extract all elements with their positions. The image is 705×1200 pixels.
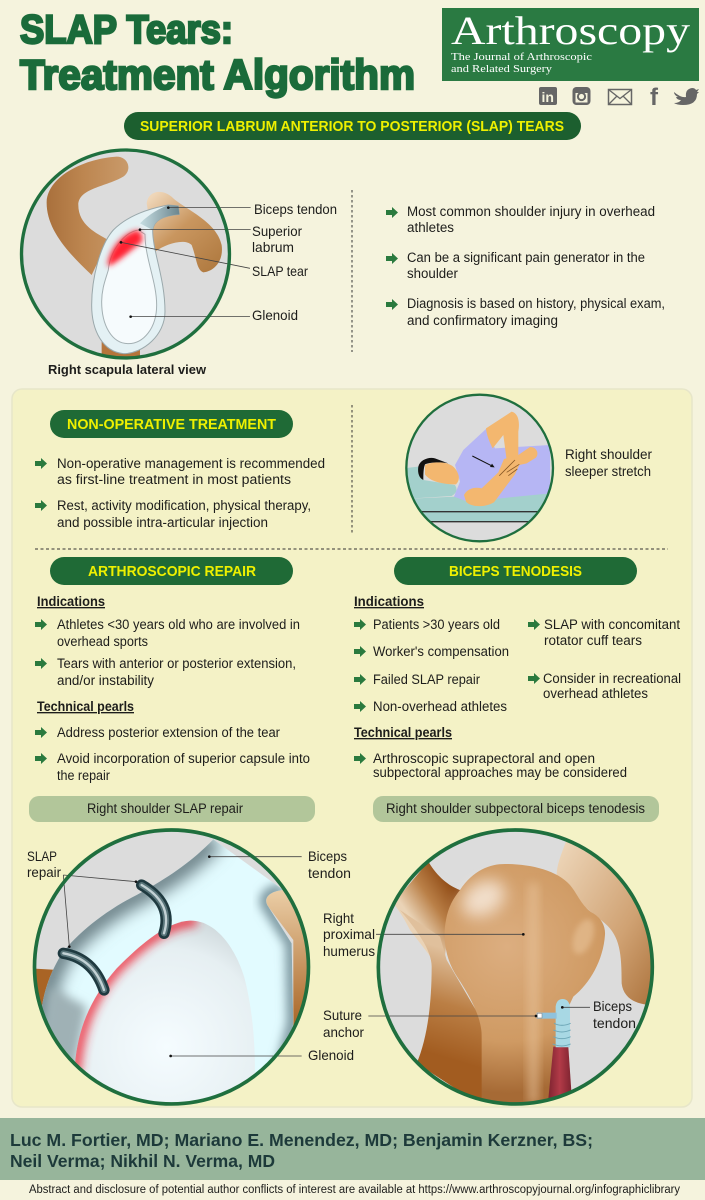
- tenodesis labels: humerus: [323, 943, 375, 959]
- illustration: subpectoral biceps tenodesis: [368, 830, 660, 1107]
- biceps tenodesis text: rotator cuff tears: [544, 633, 642, 648]
- title: SLAP Tears:: [20, 8, 233, 52]
- biceps tenodesis text: Non-overhead athletes: [373, 699, 507, 714]
- anatomy labels: Glenoid: [252, 307, 298, 323]
- journal logo: The Journal of Arthroscopic: [451, 52, 592, 63]
- SLAP repair labels: [27, 848, 354, 1063]
- biceps tenodesis text: [354, 594, 681, 780]
- caption pill: subpectoral biceps tenodesis: [373, 796, 659, 822]
- SLAP repair labels: SLAP: [27, 848, 57, 864]
- sleeper stretch label: sleeper stretch: [565, 463, 651, 479]
- social icons: [539, 84, 699, 111]
- tenodesis labels: Biceps: [593, 998, 632, 1014]
- non-operative bullets: as first-line treatment in most patients: [57, 472, 291, 487]
- callout lines: [120, 206, 251, 318]
- arthroscopic repair text: and/or instability: [57, 673, 154, 688]
- arthroscopic repair text: Athletes <30 years old who are involved in: [57, 617, 300, 632]
- arthroscopic repair text: Indications: [37, 594, 105, 609]
- authors band: Luc M. Fortier, MD; Mariano E. Menendez, MD; Benjamin Kerzner, BS;: [10, 1130, 593, 1150]
- biceps tenodesis text: Worker's compensation: [373, 644, 509, 659]
- overview bullets: shoulder: [407, 266, 458, 281]
- tenodesis labels: Suture: [323, 1007, 362, 1023]
- journal logo: and Related Surgery: [451, 64, 553, 75]
- non-operative bullets: [35, 456, 325, 530]
- anatomy labels: Superior: [252, 223, 302, 239]
- SLAP repair labels: Glenoid: [308, 1047, 354, 1063]
- arthroscopic repair text: Avoid incorporation of superior capsule into: [57, 751, 310, 766]
- biceps tenodesis text: Consider in recreational: [543, 671, 681, 686]
- social icons: in: [542, 89, 554, 105]
- caption pill: SLAP repair: [29, 796, 315, 822]
- panel: treatment: [12, 389, 692, 1107]
- tenodesis labels: tendon: [593, 1015, 636, 1031]
- anatomy illustration: right scapula lateral view: [21, 150, 251, 362]
- biceps tenodesis text: overhead athletes: [543, 686, 648, 701]
- biceps tenodesis text: Indications: [354, 594, 424, 609]
- tenodesis labels: proximal: [323, 926, 375, 942]
- tenodesis labels: anchor: [323, 1024, 364, 1040]
- heading pill: non-operative treatment: [50, 410, 293, 438]
- biceps tenodesis text: Technical pearls: [354, 725, 452, 740]
- biceps tenodesis text: Patients >30 years old: [373, 617, 500, 632]
- heading pill: arthroscopic repair: ARTHROSCOPIC REPAIR: [88, 563, 256, 580]
- authors band: [0, 1118, 705, 1180]
- anatomy labels: SLAP tear: [252, 263, 308, 279]
- biceps tenodesis text: SLAP with concomitant: [544, 617, 680, 632]
- biceps tenodesis text: Arthroscopic suprapectoral and open: [373, 751, 595, 766]
- journal logo: Arthroscopy: [451, 8, 690, 53]
- overview bullets: and confirmatory imaging: [407, 313, 558, 328]
- sleeper stretch label: [565, 446, 652, 479]
- arthroscopic repair text: Address posterior extension of the tear: [57, 725, 280, 740]
- illustration: SLAP repair: [30, 830, 313, 1120]
- journal logo: [442, 8, 699, 81]
- arthroscopic repair text: overhead sports: [57, 634, 148, 649]
- caption pill: SLAP repair: Right shoulder SLAP repair: [87, 801, 243, 816]
- tenodesis labels: [323, 910, 636, 1040]
- anatomy labels: Biceps tendon: [254, 201, 337, 217]
- arthroscopic repair text: [35, 594, 310, 783]
- non-operative bullets: Rest, activity modification, physical therapy,: [57, 498, 311, 513]
- anatomy labels: labrum: [252, 239, 294, 255]
- overview bullets: Diagnosis is based on history, physical exam,: [407, 296, 665, 311]
- title: [20, 8, 415, 98]
- biceps tenodesis text: subpectoral approaches may be considered: [373, 765, 627, 780]
- heading pill: biceps tenodesis: [394, 557, 637, 585]
- social icons: f: [650, 84, 659, 111]
- tenodesis callout lines: [368, 933, 590, 1017]
- illustration: sleeper stretch: [403, 395, 553, 541]
- non-operative bullets: and possible intra-articular injection: [57, 515, 268, 530]
- caption pill: subpectoral biceps tenodesis: Right shoulder subpectoral biceps tenodesis: [386, 801, 645, 816]
- title: Treatment Algorithm: [20, 51, 415, 98]
- overview bullets: athletes: [407, 220, 454, 235]
- heading pill: biceps tenodesis: BICEPS TENODESIS: [449, 563, 582, 580]
- footer note: Abstract and disclosure of potential author conflicts of interest are available at https://www.arthroscopyjournal.org/infographiclibrary: [29, 1184, 680, 1196]
- caption: right scapula: Right scapula lateral view: [48, 362, 207, 377]
- anatomy labels: [252, 201, 337, 323]
- biceps tenodesis text: Failed SLAP repair: [373, 672, 480, 687]
- authors band: Neil Verma; Nikhil N. Verma, MD: [10, 1151, 275, 1171]
- heading pill: arthroscopic repair: [50, 557, 293, 585]
- heading pill: SLAP tears: SUPERIOR LABRUM ANTERIOR TO POSTERIOR (SLAP) TEARS: [140, 118, 564, 135]
- heading pill: SLAP tears: [124, 112, 581, 140]
- arthroscopic repair text: the repair: [57, 768, 110, 783]
- sleeper stretch label: Right shoulder: [565, 446, 652, 462]
- repair callout lines: [63, 855, 302, 1057]
- arthroscopic repair text: Tears with anterior or posterior extension,: [57, 656, 296, 671]
- arthroscopic repair text: Technical pearls: [37, 699, 134, 714]
- overview bullets: Can be a significant pain generator in the: [407, 250, 645, 265]
- overview bullets: [386, 204, 665, 328]
- non-operative bullets: Non-operative management is recommended: [57, 456, 325, 471]
- SLAP repair labels: repair: [27, 864, 61, 880]
- tenodesis labels: Right: [323, 910, 354, 926]
- overview bullets: Most common shoulder injury in overhead: [407, 204, 655, 219]
- heading pill: non-operative treatment: NON-OPERATIVE TREATMENT: [67, 416, 276, 433]
- SLAP repair labels: tendon: [308, 865, 351, 881]
- SLAP repair labels: Biceps: [308, 848, 347, 864]
